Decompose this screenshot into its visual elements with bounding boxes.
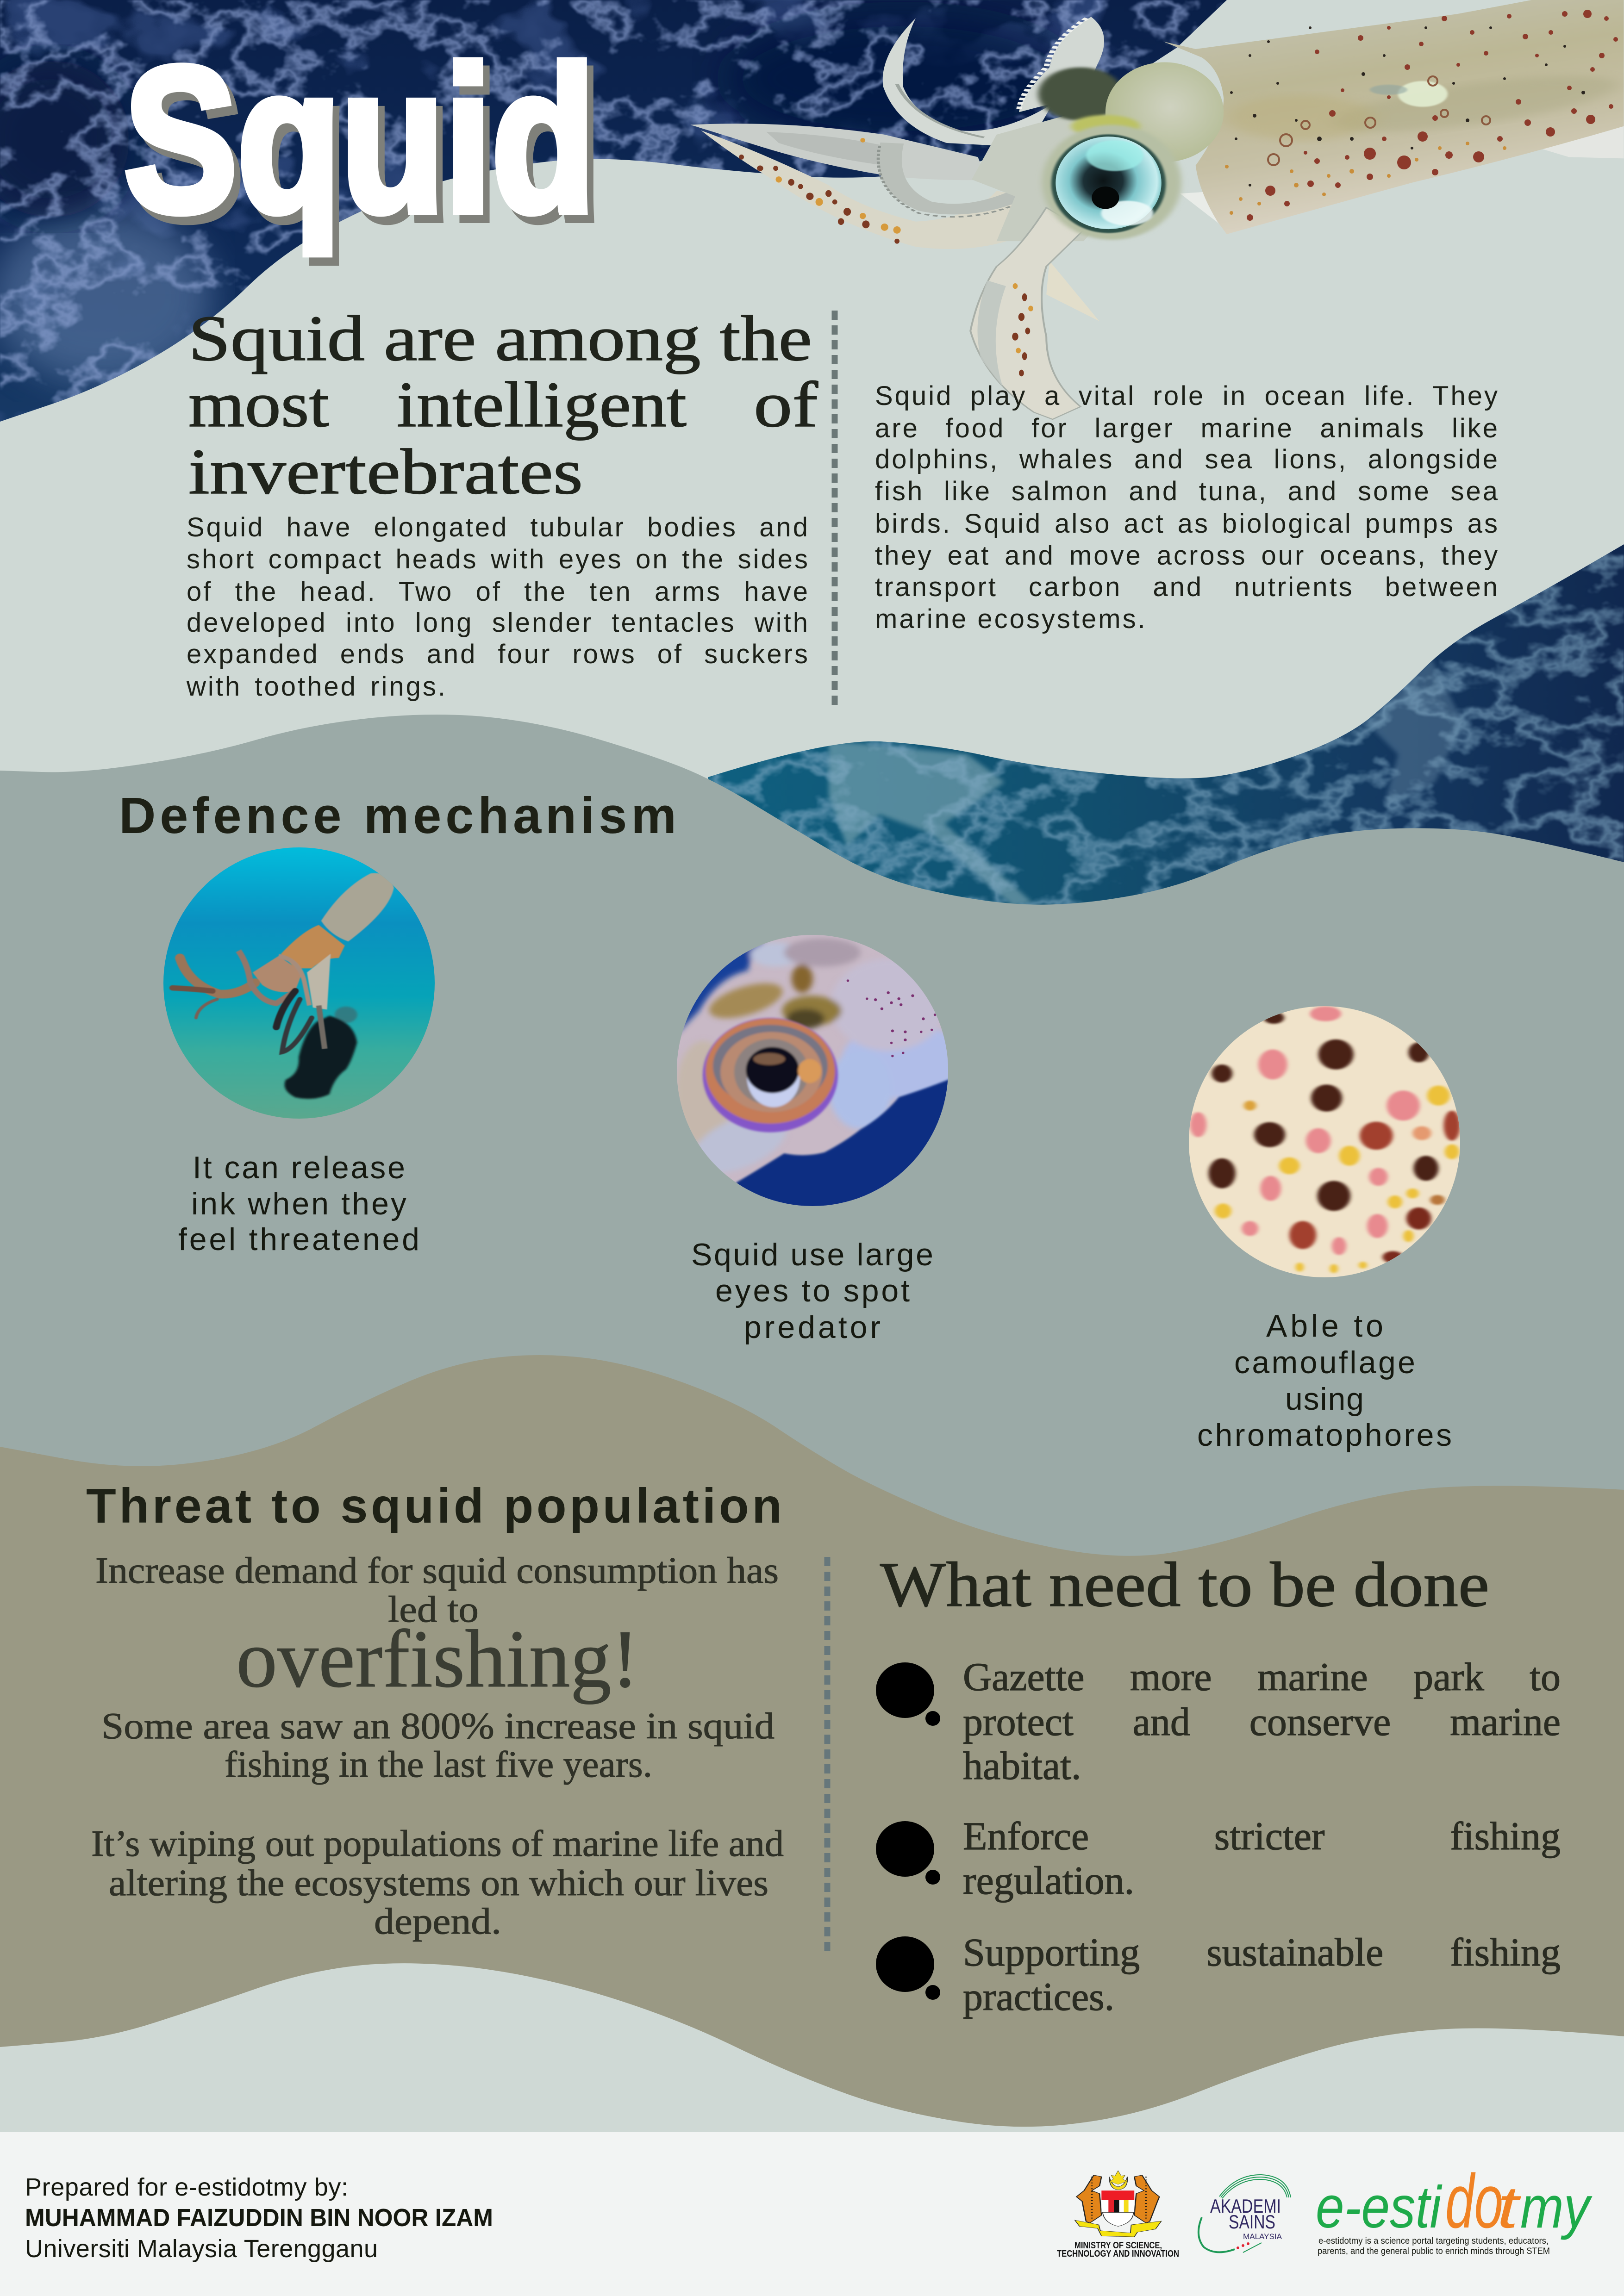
caption: ink: It can release xyxy=(193,1150,405,1185)
footer credit text: Universiti Malaysia Terengganu xyxy=(25,2235,378,2263)
heading: intelligence: of xyxy=(754,369,818,441)
logo: ministry of science xyxy=(1057,2171,1179,2259)
text block: overfishing: overfishing! xyxy=(236,1613,639,1705)
list item: gazette marine parks: habitat. xyxy=(963,1743,1081,1788)
grey wave panel: defence mechanism xyxy=(0,715,1624,1574)
photo: squid eye xyxy=(677,935,948,1206)
text block: overfishing: fishing in the last five years. xyxy=(225,1744,652,1785)
list item: sustainable fishing: practices. xyxy=(963,1974,1114,2019)
logo: akademi sains malaysia: AKADEMI xyxy=(1210,2195,1281,2217)
caption: ink xyxy=(178,1150,419,1257)
divider: lower columns xyxy=(824,1557,831,1957)
logo: akademi sains malaysia: SAINS xyxy=(1229,2211,1275,2233)
caption: eyes xyxy=(691,1237,933,1345)
text block: overfishing: depend. xyxy=(374,1901,501,1942)
list item: enforce regulation xyxy=(963,1816,1561,1899)
caption: camouflage: Able to xyxy=(1266,1308,1383,1344)
text block: role in ocean life: marine ecosystems. xyxy=(875,604,1147,634)
text block: overfishing: Increase demand for squid consumption has xyxy=(95,1550,779,1591)
text block: squid body description: with toothed rings. xyxy=(187,672,447,702)
caption: ink: feel threatened xyxy=(178,1222,419,1257)
photo: squid releasing ink xyxy=(163,847,435,1119)
title: Squid: Squid xyxy=(124,25,595,255)
text block: squid body description: of the head. Two of the ten arms have xyxy=(187,577,810,607)
logo: akademi sains malaysia: MALAYSIA xyxy=(1243,2232,1282,2241)
list item: gazette marine parks xyxy=(963,1657,1561,1786)
text block: squid body description xyxy=(187,514,810,699)
list item: enforce regulation: Enforce stricter fishing xyxy=(963,1814,1561,1858)
text block: overfishing: Some area saw an 800% increase in squid xyxy=(101,1706,775,1747)
logo: e-estidotmy: do xyxy=(1445,2159,1503,2244)
olive wave panel: threat and actions xyxy=(0,1355,1624,2152)
heading: intelligence xyxy=(188,303,818,508)
heading: defence mechanism: Defence mechanism xyxy=(119,787,676,844)
text block: role in ocean life: are food for larger marine animals like xyxy=(875,413,1499,443)
caption: eyes: Squid use large xyxy=(691,1237,933,1272)
footer credit text xyxy=(25,2173,493,2263)
text block: squid body description: short compact heads with eyes on the sides xyxy=(187,544,810,574)
footer credit text: Prepared for e-estidotmy by: xyxy=(25,2173,348,2201)
text block: overfishing: It’s wiping out populations of marine life and xyxy=(91,1823,784,1864)
caption: ink: ink when they xyxy=(191,1186,406,1221)
heading: what need to be done: What need to be done xyxy=(880,1549,1489,1620)
text block: role in ocean life: they eat and move across our oceans, they xyxy=(875,541,1499,571)
heading: threat to squid population: Threat to squid population xyxy=(86,1479,782,1533)
heading: intelligence: Squid are among the xyxy=(188,303,812,374)
list item: gazette marine parks: Gazette more marine park to xyxy=(963,1655,1561,1699)
light wave band above footer xyxy=(0,1963,1624,2152)
text block: squid body description: Squid have elongated tubular bodies and xyxy=(187,512,810,542)
caption: eyes: eyes to spot xyxy=(715,1273,910,1308)
caption: camouflage: camouflage xyxy=(1234,1345,1415,1380)
list item: sustainable fishing: Supporting sustainable fishing xyxy=(963,1930,1561,1974)
list item: enforce regulation: regulation. xyxy=(963,1858,1134,1903)
text block: role in ocean life: Squid play a vital role in ocean life. They xyxy=(875,381,1499,411)
caption: eyes: predator xyxy=(744,1310,881,1345)
text block: overfishing: led to xyxy=(388,1589,479,1630)
list item: gazette marine parks: protect and conserve marine xyxy=(963,1699,1561,1744)
logo: e-estidotmy xyxy=(1316,2159,1593,2256)
text block: squid body description: expanded ends and four rows of suckers xyxy=(187,639,810,669)
divider: intro columns xyxy=(831,311,838,709)
text block: role in ocean life: birds. Squid also act as biological pumps as xyxy=(875,509,1499,539)
text block: role in ocean life xyxy=(875,383,1499,633)
ocean background: top xyxy=(0,0,1250,444)
footer credit text: MUHAMMAD FAIZUDDIN BIN NOOR IZAM xyxy=(25,2204,493,2232)
logo: ministry of science: TECHNOLOGY AND INNOVATION xyxy=(1057,2249,1179,2259)
footer band xyxy=(0,2132,1624,2296)
logo: e-estidotmy: parents, and the general public to enrich minds through STEM xyxy=(1318,2246,1550,2256)
icon: bullet 3 xyxy=(876,1936,940,2000)
ocean background: middle band xyxy=(708,541,1624,926)
text block: role in ocean life: fish like salmon and tuna, and some sea xyxy=(875,476,1499,506)
photo: chromatophores xyxy=(1189,1006,1460,1277)
list item: sustainable fishing xyxy=(963,1932,1561,2016)
text block: role in ocean life: transport carbon and nutrients between xyxy=(875,572,1499,602)
illustration: squid xyxy=(690,0,1624,419)
icon: bullet 1 xyxy=(876,1662,940,1726)
logo: e-estidotmy: e-estidotmy is a science portal targeting students, educators, xyxy=(1318,2236,1549,2246)
caption: camouflage: using xyxy=(1285,1381,1364,1417)
logo: e-estidotmy: my xyxy=(1520,2174,1593,2240)
text block: overfishing: altering the ecosystems on which our lives xyxy=(109,1863,768,1904)
caption: camouflage: chromatophores xyxy=(1197,1418,1452,1453)
caption: camouflage xyxy=(1197,1308,1452,1453)
text block: squid body description: developed into long slender tentacles with xyxy=(187,608,810,638)
logo: e-estidotmy: e-esti xyxy=(1316,2174,1443,2240)
heading: intelligence: invertebrates xyxy=(188,436,583,508)
text block: role in ocean life: dolphins, whales and sea lions, alongside xyxy=(875,444,1499,474)
heading: intelligence: most xyxy=(188,369,329,441)
icon: bullet 2 xyxy=(876,1821,940,1885)
logo: e-estidotmy: t xyxy=(1497,2174,1521,2240)
logo: akademi sains malaysia xyxy=(1199,2175,1291,2252)
text block: overfishing xyxy=(91,1550,784,1942)
title: Squid: Squid xyxy=(131,33,602,264)
heading: intelligence: intelligent xyxy=(397,369,687,441)
logo: ministry of science: MINISTRY OF SCIENCE, xyxy=(1074,2240,1162,2251)
